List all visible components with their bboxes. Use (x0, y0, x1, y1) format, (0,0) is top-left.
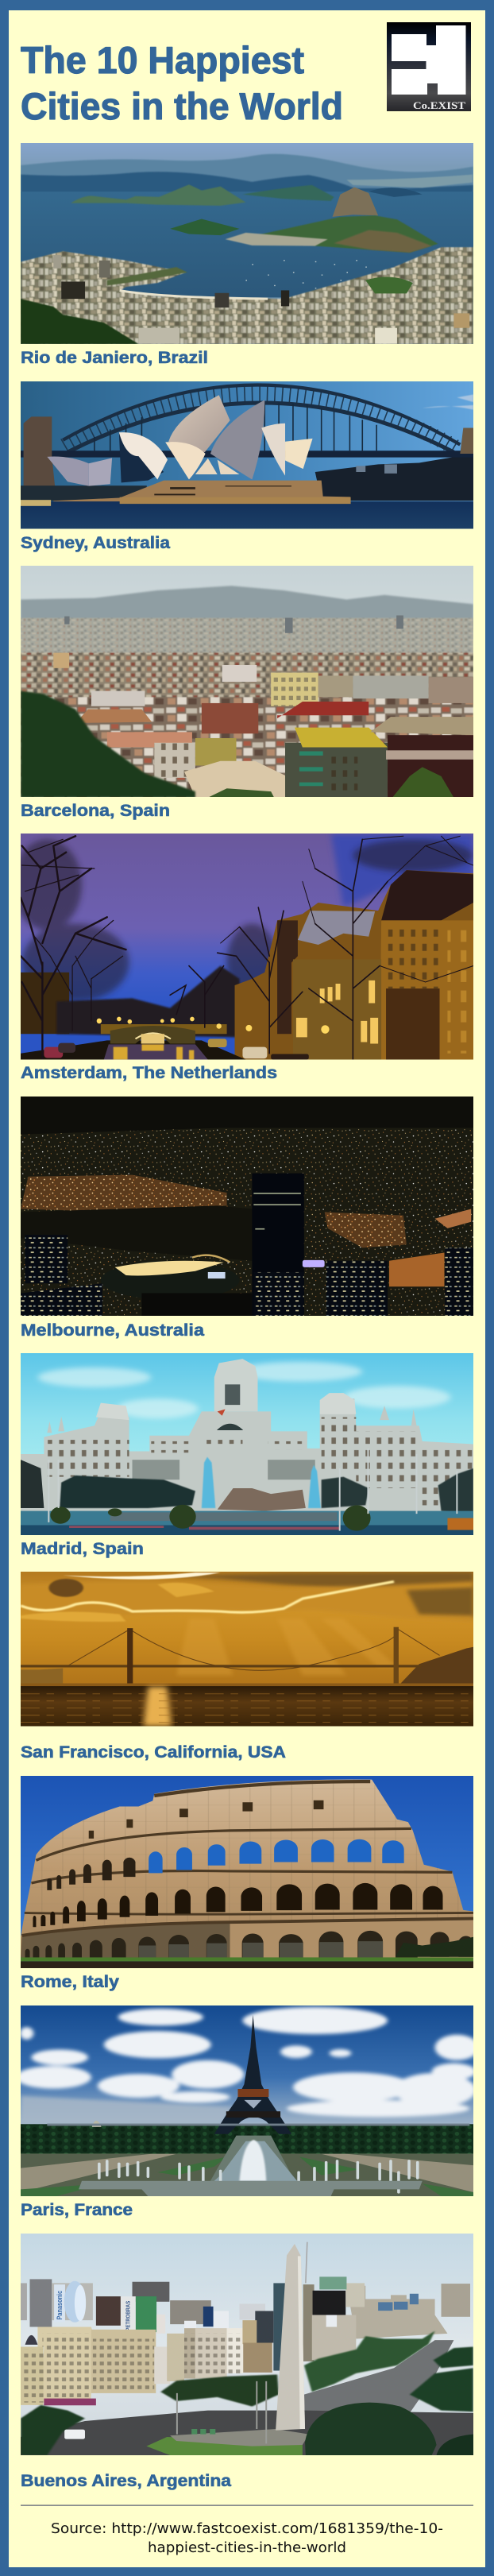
lamp posts (48, 1449, 457, 1531)
moored boats (245, 261, 367, 288)
street lamps (97, 1017, 330, 1034)
far right glow (435, 1209, 471, 1228)
sun rays (176, 1619, 397, 1676)
window rows (44, 1418, 473, 1505)
street level (21, 1040, 245, 1060)
forest hill lower left (21, 299, 138, 344)
blue billboard (203, 2307, 214, 2327)
lit windows right (447, 930, 469, 1054)
ornate building (91, 2330, 156, 2393)
sail F (261, 424, 285, 476)
corner building left (37, 2327, 95, 2403)
deck (21, 1665, 421, 1667)
dark red building (388, 735, 473, 798)
lower haze clouds (21, 2096, 233, 2124)
left street trees (160, 2375, 279, 2407)
orange lit band left (21, 1175, 227, 1213)
wall at bottom (21, 1961, 473, 1968)
far towers (64, 615, 403, 633)
photo: Sydney Opera House and Harbour Bridge (21, 381, 473, 529)
title: Cities in the World (21, 85, 343, 127)
far shore (21, 1684, 473, 1687)
avenue road (304, 2340, 453, 2413)
awnings (299, 751, 323, 786)
bridge upper chord (63, 385, 460, 445)
sail G (285, 439, 313, 469)
shaded lower left arcade (21, 1921, 230, 1959)
top bright streak (63, 1572, 221, 1580)
clouds (423, 394, 473, 410)
bottom arch grilles (139, 1941, 383, 1959)
sail E bright (165, 442, 206, 480)
small sails left (47, 457, 89, 486)
title (21, 39, 343, 127)
sail D big grey (210, 400, 264, 480)
small sails shaded (89, 458, 112, 486)
island right (369, 188, 423, 197)
photo: San Francisco Golden Gate sunset (21, 1572, 473, 1726)
trees right along avenue (304, 2330, 435, 2392)
central lawn patches (21, 2156, 473, 2196)
dark right patches (407, 1588, 473, 1615)
left pylon (24, 416, 55, 487)
Marin headland (400, 1647, 473, 1685)
right tree (392, 767, 453, 798)
yellow apartment block (271, 673, 318, 706)
colosseum body (21, 1779, 473, 1959)
caption: Rome: Rome, Italy (21, 1973, 119, 1991)
cornices (22, 1781, 473, 1936)
dark gabled roof big (381, 870, 473, 920)
distant glow under bridge (141, 1034, 164, 1043)
dark river and towers left (21, 1205, 252, 1261)
other billboards (184, 2311, 337, 2371)
bridge deck (21, 451, 473, 458)
tower windows (225, 1384, 240, 1405)
water reflections (114, 1044, 194, 1060)
terracotta low roof (107, 732, 192, 748)
green apartment block (285, 743, 388, 798)
canal bridge (110, 1026, 195, 1043)
mountain ridge behind sugarloaf (242, 185, 334, 201)
tower left (127, 1628, 133, 1684)
photo: Melbourne at night (21, 1097, 473, 1316)
left buildings (21, 973, 69, 1034)
stadium arch (192, 1255, 230, 1263)
stadium lit roof (115, 1261, 224, 1275)
sign strip (44, 2399, 96, 2405)
central left trees (60, 1476, 195, 1508)
central fountain (239, 2140, 266, 2181)
park trees (21, 2124, 473, 2154)
terracotta roofs (75, 710, 152, 723)
photo: Madrid Cibeles palace (21, 1353, 473, 1535)
plaza (21, 2154, 473, 2196)
right building edge (445, 1247, 473, 1316)
flower beds (69, 1526, 340, 1530)
obelisk (276, 2244, 305, 2431)
blue accents (378, 2294, 419, 2311)
caption: Sydney: Sydney, Australia (21, 534, 170, 552)
panasonic billboard: Panasonic (56, 2290, 64, 2319)
Cibeles sculpture (218, 1488, 306, 1511)
caption: Amsterdam: Amsterdam, The Netherlands (21, 1064, 277, 1082)
left trees (21, 691, 195, 798)
caption: Rio: Rio de Janiero, Brazil (21, 349, 208, 367)
corner trees (21, 2405, 85, 2455)
distant tree line (56, 966, 239, 1037)
fountain right (308, 1465, 321, 1508)
far city (21, 618, 473, 657)
red brick building (202, 703, 258, 733)
foreground city (21, 697, 473, 798)
caption: Melbourne: Melbourne, Australia (21, 1321, 204, 1340)
bottom arcade arches (25, 1931, 473, 1959)
obelisk antenna (306, 2242, 307, 2283)
basin (21, 1511, 473, 1528)
left dark trees (21, 1460, 44, 1508)
podium (53, 481, 350, 502)
Eiffel Tower (214, 2015, 291, 2134)
right pylon (460, 428, 473, 454)
centre avenue (202, 2136, 303, 2196)
stadium light panel (208, 1272, 226, 1278)
source credit: happiest-cities-in-the-world (148, 2540, 346, 2556)
icon: Co.Exist logo: Co.EXIST (413, 99, 465, 111)
left tree canopy haze (13, 839, 473, 1001)
bright cloud edge (21, 1582, 394, 1612)
neighbouring blocks (53, 653, 473, 706)
panasonic billboard (54, 2281, 86, 2323)
lower right stone darker (230, 1917, 473, 1959)
white bus (64, 2430, 85, 2439)
neighbourhood strip (226, 233, 328, 246)
dark tower house (277, 920, 298, 1034)
sun glitter (143, 1687, 172, 1726)
bare rock face on hill (334, 230, 432, 253)
bridge lower chord (68, 403, 453, 452)
photo: Barcelona skyline (21, 566, 473, 797)
pedestal (170, 2429, 309, 2446)
domed turret corner (21, 2347, 44, 2405)
stadium base (101, 1261, 239, 1300)
bay water (21, 1686, 473, 1726)
petrobras billboard (121, 2296, 165, 2334)
fort arches (21, 1669, 63, 1684)
central arch window (217, 1424, 243, 1430)
caption: Madrid: Madrid, Spain (21, 1540, 144, 1558)
source credit (51, 2521, 443, 2556)
orange kiosk (447, 1518, 473, 1530)
mid skyline right (346, 2286, 447, 2338)
fountain basin rim (110, 1512, 338, 1521)
canal water (104, 1044, 208, 1060)
clouds (16, 2007, 479, 2117)
dark buildings right (326, 1261, 388, 1316)
quay base (120, 497, 351, 504)
upper dark cloud band (164, 1572, 473, 1619)
large flat roof (370, 717, 473, 735)
forecourt dark (21, 485, 147, 501)
sails interior (119, 432, 164, 482)
blue upper right sky (331, 834, 473, 907)
photo: Rio de Janeiro bay and Sugarloaf (21, 143, 473, 344)
pale promenades (21, 2154, 473, 2192)
city foreground (21, 247, 473, 344)
caption: Buenos Aires: Buenos Aires, Argentina (21, 2472, 231, 2490)
podium shadow stripes (154, 485, 291, 495)
upper arcade dark arches left (47, 1858, 135, 1890)
green shore (107, 267, 187, 285)
attic windows (89, 1800, 323, 1839)
right hillside (315, 454, 473, 501)
bare trees (21, 836, 473, 1060)
lawn (21, 1957, 473, 1961)
quay left (21, 500, 51, 506)
sail C large back (168, 395, 230, 452)
tower right (394, 1627, 399, 1684)
lower left buildings (25, 1235, 68, 1283)
shrubs (50, 1505, 371, 1531)
dark cloud puff (48, 1579, 83, 1597)
roadway foreground (21, 1525, 473, 1535)
lit bridge arch (135, 1033, 171, 1039)
amber lit facades (380, 920, 473, 1060)
main dark tower (252, 1174, 304, 1316)
lower basin (79, 2181, 423, 2196)
big foreground tree (305, 2403, 437, 2455)
right trees (410, 2347, 473, 2412)
glowing distance (101, 1024, 227, 1034)
junction road (21, 2411, 473, 2455)
bins (191, 2429, 215, 2435)
flag (218, 1409, 226, 1416)
bushes at right base (396, 1937, 473, 1957)
small wooded island (170, 219, 239, 235)
roof snow (298, 911, 375, 945)
caption: Barcelona: Barcelona, Spain (21, 802, 170, 820)
bridge lattice (64, 394, 457, 448)
lower centre block (141, 1293, 252, 1316)
dark skyline buildings right (356, 464, 397, 474)
petrobras billboard: PETROBRAS (125, 2300, 132, 2330)
fountain left (202, 1457, 215, 1508)
Sugarloaf rock (333, 188, 378, 217)
caption: San Francisco: San Francisco, California, USA (21, 1743, 286, 1762)
title: The 10 Happiest (21, 39, 304, 81)
lower cloud lobes (21, 1583, 214, 1622)
small bushes (208, 788, 274, 798)
distant skyline (47, 2124, 469, 2125)
Botafogo beach (120, 290, 268, 299)
buildings behind obelisk (239, 2276, 365, 2371)
main palace body (21, 1398, 473, 1517)
tower top windows (253, 1193, 301, 1230)
icon: Co.Exist logo (387, 22, 471, 111)
fountain jets (99, 2161, 418, 2192)
tower lit office floors (253, 1272, 304, 1316)
lawn roundabout (146, 2437, 303, 2455)
sail B (119, 432, 168, 480)
far right tower (442, 2284, 470, 2317)
foreground block left (21, 1283, 102, 1316)
distant towers left (21, 2279, 211, 2327)
mid city (21, 653, 473, 705)
bridge hangers (95, 402, 376, 451)
street lamps (177, 2381, 266, 2443)
parked cars (44, 1039, 309, 1060)
source credit: Source: http://www.fastcoexist.com/1681359/the-10- (51, 2521, 443, 2537)
towers and hill patch (53, 255, 469, 344)
lower right tree (437, 2435, 473, 2455)
ochre house (195, 738, 237, 766)
photo: Amsterdam canal at dusk (21, 834, 473, 1060)
water ripples (21, 1694, 473, 1722)
white apartment row (154, 2320, 272, 2384)
clouds (37, 1362, 450, 1418)
roof red centre (277, 702, 369, 718)
main cables (66, 1627, 440, 1670)
lit windows (296, 981, 378, 1043)
upper arcade sky arches (149, 1839, 404, 1873)
invalides dome (92, 2121, 102, 2127)
spires (47, 1406, 417, 1433)
low sails (195, 458, 239, 474)
cream house (154, 743, 195, 778)
far shoreline (346, 175, 473, 188)
right tower spires (320, 1393, 356, 1414)
hills (21, 586, 473, 630)
left islands (71, 184, 245, 206)
photo: Paris Eiffel Tower and Trocadero (21, 2005, 473, 2196)
harbour (21, 501, 473, 529)
orange lit rail yards (389, 1253, 444, 1286)
pool (211, 2141, 299, 2183)
Urca hill (258, 215, 438, 253)
caption: Paris: Paris, France (21, 2201, 133, 2219)
mid cloud bank (21, 1582, 473, 1622)
orange lit band right (325, 1213, 407, 1247)
sea (21, 191, 473, 297)
city lights field (21, 1128, 473, 1316)
yellow top floor (295, 728, 388, 748)
cream foreground roof (184, 761, 287, 798)
right houses back (235, 870, 473, 1060)
central tower (214, 1359, 257, 1411)
right trees (322, 1468, 473, 1514)
neon purple sign (303, 1260, 325, 1267)
middle arcade arches (33, 1883, 442, 1927)
left tower top (96, 1403, 129, 1420)
photo: Buenos Aires Obelisco (21, 2234, 473, 2455)
photo: Rome Colosseum (21, 1776, 473, 1968)
